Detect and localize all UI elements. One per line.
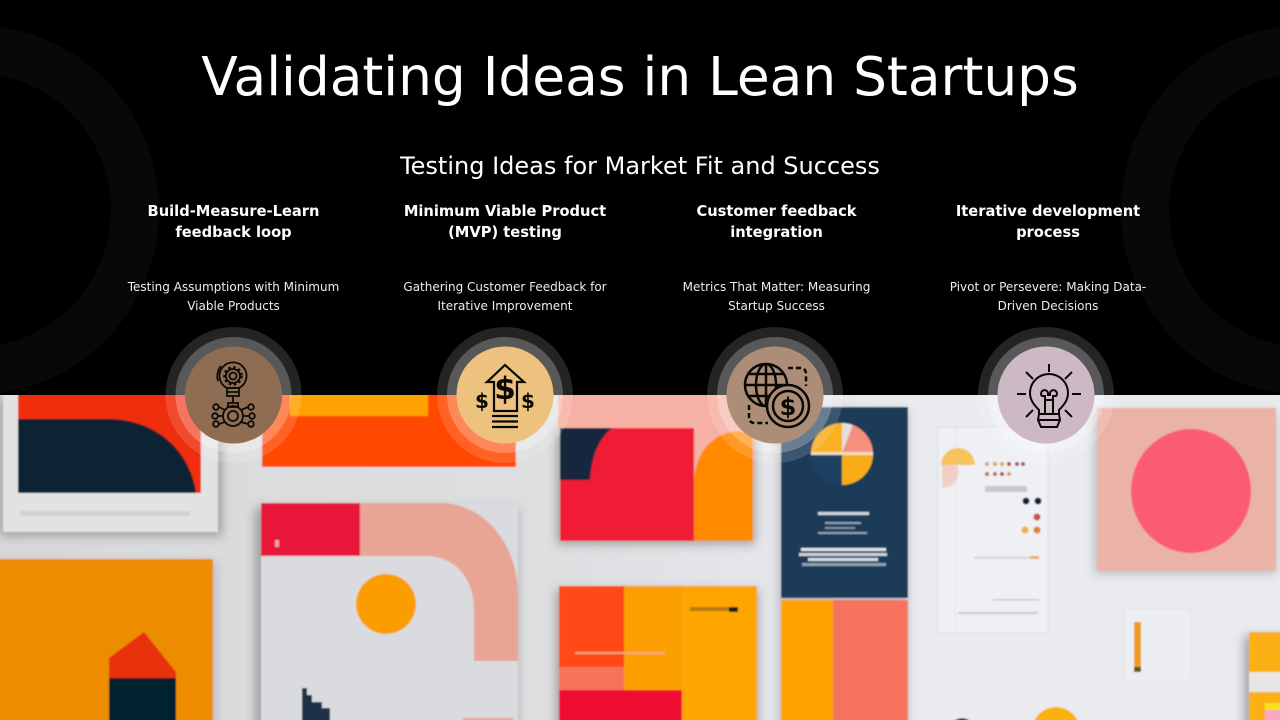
heading: customer feedback [696,203,857,241]
icon: dollar up arrow: $ [494,371,516,407]
lower poster [781,600,908,720]
heading: build-measure-learn: Build-Measure-Learn [148,203,319,220]
text: customer feedback description: Metrics That Matter: Measuring [683,280,870,294]
bottom objects [1032,707,1080,720]
icon: lightbulb with gear and network [166,327,302,463]
heading: iterative development: process [1016,224,1080,241]
text: customer feedback description: Startup Success [728,299,825,313]
text: MVP description: Gathering Customer Feedback for [403,280,607,294]
icon: dollar up arrow [437,327,573,463]
text: iterative development description [950,280,1146,313]
background decorative rings [0,0,1280,395]
icon: lightbulb with rays [978,327,1114,463]
text: customer feedback description [683,280,870,313]
right-edge card [1249,632,1280,720]
text: build-measure-learn description: Testing Assumptions with Minimum [128,280,339,294]
small card [1124,609,1190,681]
navy poster [781,407,908,598]
bottom centre orange card [559,586,757,720]
text: build-measure-learn description [128,280,339,313]
top-left card [3,375,218,532]
document [938,427,1048,633]
photo: flat-lay of geometric design prints [0,395,1280,720]
heading: build-measure-learn [148,203,319,241]
white arc card [261,503,518,720]
heading: iterative development [956,203,1140,241]
icon: globe and coin: $ [780,393,796,421]
heading: MVP testing: (MVP) testing [448,224,562,241]
subtitle: Testing Ideas for Market Fit and Success [400,152,880,180]
text: iterative development description: Driven Decisions [998,299,1098,313]
text: MVP description [403,280,607,313]
pink card [1097,408,1276,571]
shadows [0,398,1280,720]
top centre card [558,375,754,429]
text: iterative development description: Pivot or Persevere: Making Data- [950,280,1146,294]
icon: globe and coin [707,327,843,463]
bottom-left orange card [0,559,213,720]
heading: customer feedback: integration [730,224,823,241]
heading: customer feedback: Customer feedback [696,203,857,220]
heading: build-measure-learn: feedback loop [175,224,292,241]
title: Validating Ideas in Lean Startups [201,45,1079,108]
heading: MVP testing [404,203,606,241]
text: MVP description: Iterative Improvement [438,299,572,313]
top orange card [262,375,516,467]
icon: dollar up arrow: $ [475,389,489,413]
text: build-measure-learn description: Viable Products [187,299,280,313]
heading: iterative development: Iterative development [956,203,1140,220]
heading: MVP testing: Minimum Viable Product [404,203,606,220]
icon: dollar up arrow: $ [521,389,535,413]
